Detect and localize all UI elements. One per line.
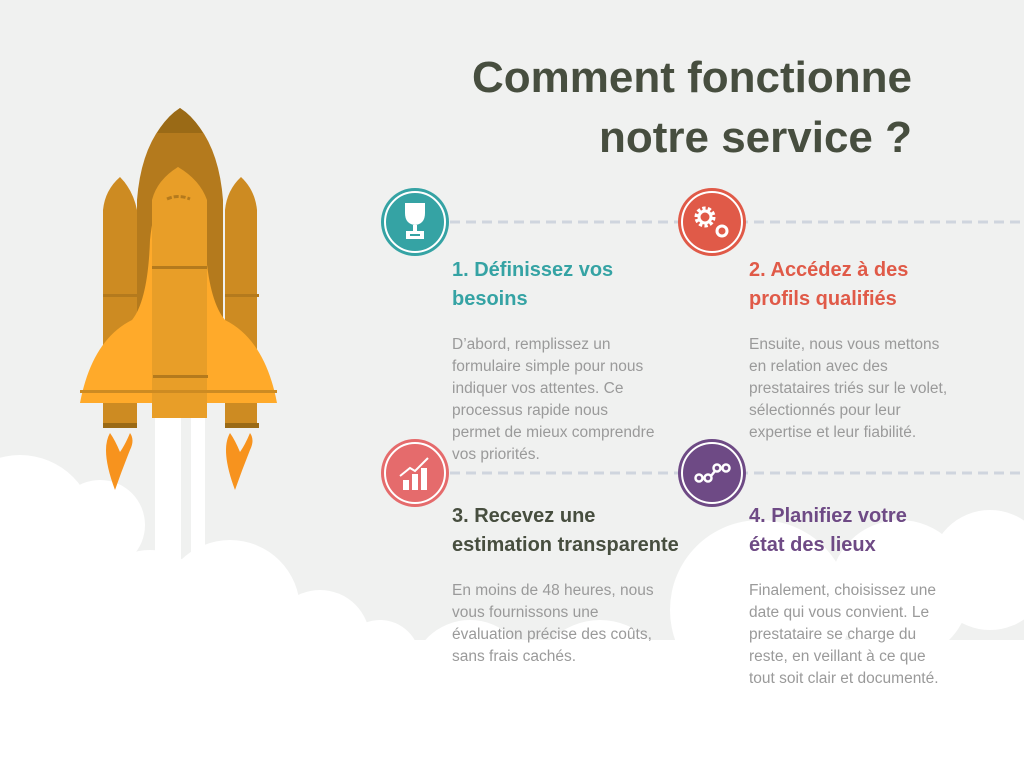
step 1: besoins	[452, 288, 528, 310]
rocket illustration	[80, 108, 277, 490]
step 4: 4. Planifiez votre	[749, 505, 907, 527]
icon: chart	[381, 439, 449, 507]
step 2: sélectionnés pour leur	[749, 402, 901, 419]
step 2: Ensuite, nous vous mettons	[749, 336, 939, 353]
icon: links	[678, 439, 746, 507]
title: Comment fonctionne	[472, 53, 912, 102]
step 2: profils qualifiés	[749, 288, 897, 310]
step 3: vous fournissons une	[452, 604, 598, 621]
step 3: évaluation précise des coûts,	[452, 626, 652, 643]
dashed lines	[450, 220, 1024, 224]
step 1: formulaire simple pour nous	[452, 358, 643, 375]
step 3: 3. Recevez une	[452, 505, 595, 527]
step 4: reste, en veillant à ce que	[749, 648, 926, 665]
step 3: estimation transparente	[452, 534, 679, 556]
step 1	[452, 259, 654, 463]
step 2: 2. Accédez à des	[749, 259, 908, 281]
step 1: processus rapide nous	[452, 402, 608, 419]
step 1: permet de mieux comprendre	[452, 424, 654, 441]
icon: trophy	[381, 188, 449, 256]
step 2: en relation avec des	[749, 358, 888, 375]
step 1: vos priorités.	[452, 446, 540, 463]
step 2: prestataires triés sur le volet,	[749, 380, 947, 397]
icon: gears	[678, 188, 746, 256]
step 1: 1. Définissez vos	[452, 259, 613, 281]
title: notre service ?	[599, 113, 912, 162]
step 4	[749, 505, 939, 687]
step 3: En moins de 48 heures, nous	[452, 582, 654, 599]
step 1: D’abord, remplissez un	[452, 336, 611, 353]
step 4: état des lieux	[749, 534, 876, 556]
step 4: date qui vous convient. Le	[749, 604, 929, 621]
title	[472, 53, 912, 162]
step 3	[452, 505, 679, 665]
step 3: sans frais cachés.	[452, 648, 576, 665]
step 2: expertise et leur fiabilité.	[749, 424, 916, 441]
step 1: indiquer vos attentes. Ce	[452, 380, 623, 397]
step 4: Finalement, choisissez une	[749, 582, 936, 599]
step 4: tout soit clair et documenté.	[749, 670, 939, 687]
step 2	[749, 259, 947, 441]
step 4: prestataire se charge du	[749, 626, 916, 643]
